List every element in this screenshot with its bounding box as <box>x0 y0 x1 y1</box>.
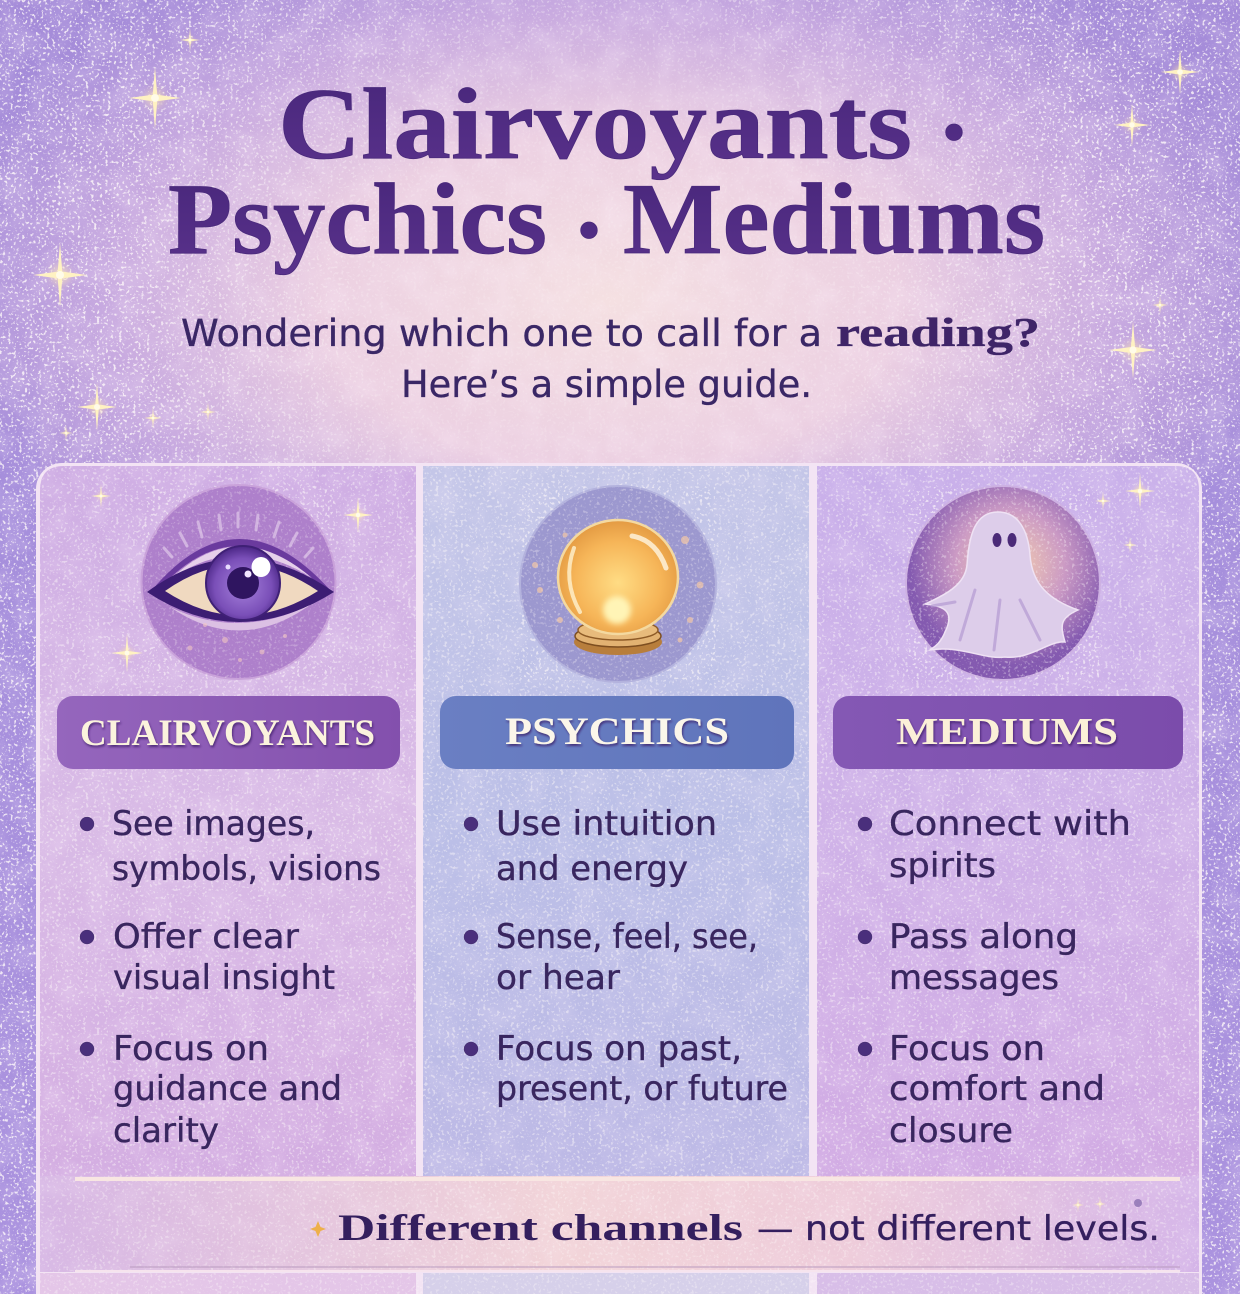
bullets: mediums: Pass along <box>889 917 1078 956</box>
subtitle <box>181 309 1040 406</box>
callout text: Different channels <box>338 1208 743 1249</box>
icon: crystal ball <box>520 486 716 682</box>
title: Mediums <box>623 163 1045 276</box>
lower column stubs <box>40 1273 1199 1294</box>
label: clairvoyants: CLAIRVOYANTS <box>80 713 375 754</box>
bullets: psychics: Focus on past, <box>496 1029 742 1068</box>
panel: mediums column <box>817 466 1199 1176</box>
bullets: psychics: or hear <box>496 958 620 997</box>
callout text <box>338 1208 1160 1249</box>
bullets: mediums: Connect with <box>889 804 1131 843</box>
title: · <box>937 76 971 189</box>
bullets: mediums <box>858 804 1131 1150</box>
bullets: clairvoyants <box>80 804 381 1150</box>
label: psychics: PSYCHICS <box>505 710 729 753</box>
title: Clairvoyants <box>278 68 912 181</box>
sparkles: mediums <box>1095 473 1155 553</box>
label: clairvoyants <box>57 696 400 769</box>
label: psychics <box>440 696 794 769</box>
title: · <box>572 174 606 287</box>
title: Psychics <box>168 163 547 276</box>
bullets: clairvoyants: clarity <box>113 1111 219 1150</box>
subtitle: reading? <box>836 309 1040 355</box>
bullets: psychics: Use intuition <box>496 804 717 843</box>
bullets: mediums: closure <box>889 1111 1013 1150</box>
bullets: clairvoyants: Offer clear <box>113 917 299 956</box>
bullets: mediums: messages <box>889 958 1059 997</box>
bullets: mediums: comfort and <box>889 1069 1105 1108</box>
sparkles: clairvoyants <box>91 484 373 672</box>
icon: ghost <box>906 486 1100 680</box>
icon: star <box>310 1221 326 1237</box>
title <box>168 68 1045 287</box>
bullets: mediums: Focus on <box>889 1029 1045 1068</box>
comparison panel <box>36 463 1202 1294</box>
bullets: mediums: spirits <box>889 846 996 885</box>
bullets: psychics: and energy <box>496 849 688 888</box>
bullets: psychics: present, or future <box>496 1069 788 1108</box>
icon: eye <box>142 485 336 679</box>
bullets: clairvoyants: visual insight <box>113 958 335 997</box>
panel: psychics column <box>423 466 809 1176</box>
bullets: clairvoyants: symbols, visions <box>112 849 381 888</box>
bullets: psychics: Sense, feel, see, <box>496 917 758 956</box>
callout text: — not different levels. <box>757 1209 1160 1248</box>
subtitle: Wondering which one to call for a <box>181 312 822 355</box>
subtitle: Here’s a simple guide. <box>401 363 812 406</box>
bullets: clairvoyants: guidance and <box>113 1069 342 1108</box>
sparkles <box>33 28 1199 441</box>
bullets: psychics <box>464 804 788 1108</box>
label: mediums <box>833 696 1183 769</box>
bullets: clairvoyants: See images, <box>112 804 315 843</box>
label: mediums: MEDIUMS <box>896 711 1118 753</box>
panel: clairvoyants column <box>40 466 416 1176</box>
bullets: clairvoyants: Focus on <box>113 1029 269 1068</box>
callout band <box>40 1176 1199 1272</box>
